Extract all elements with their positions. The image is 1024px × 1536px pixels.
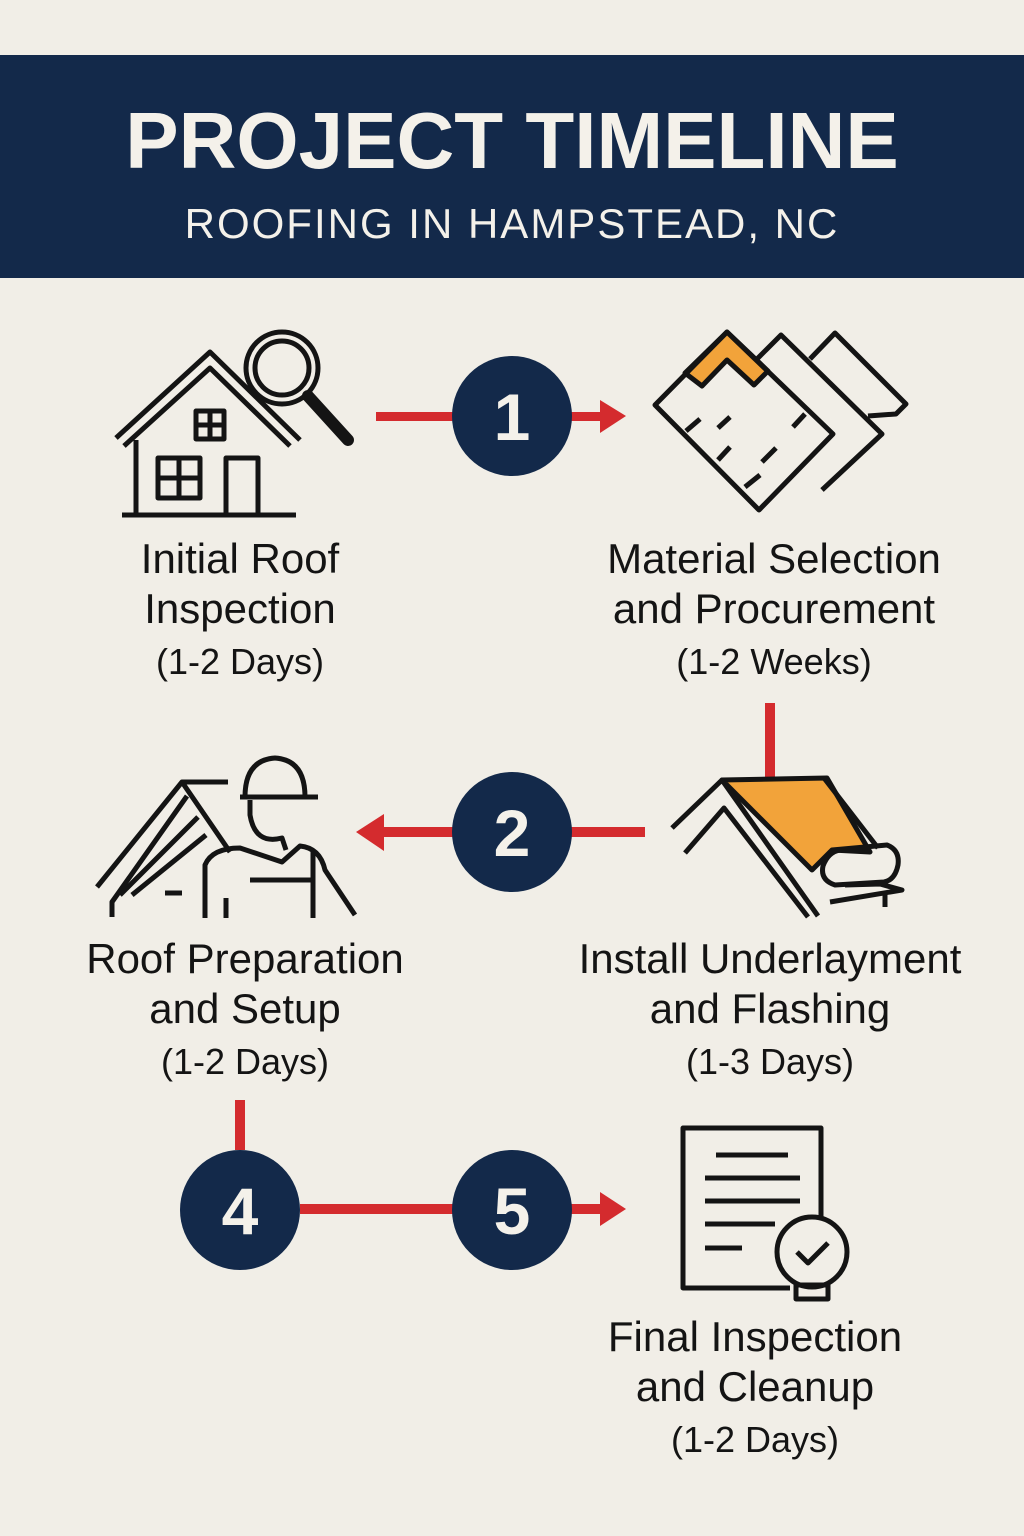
label: underlayment: and Flashing	[650, 985, 890, 1032]
icon: materials	[655, 332, 906, 510]
label: material selection: Material Selection	[607, 535, 941, 582]
step numbers: 2	[494, 796, 530, 870]
subtitle: ROOFING IN HAMPSTEAD, NC	[185, 200, 839, 247]
step numbers	[222, 380, 530, 1248]
label: roof preparation	[86, 935, 404, 1082]
icon: worker on roof	[97, 758, 355, 918]
label: roof preparation: (1-2 Days)	[161, 1041, 329, 1082]
label: roof preparation: Roof Preparation	[86, 935, 404, 982]
label: step 1: Inspection	[144, 585, 336, 632]
label: underlayment: (1-3 Days)	[686, 1041, 854, 1082]
label: material selection: and Procurement	[613, 585, 935, 632]
label: step 1	[141, 535, 340, 682]
label: final inspection: (1-2 Days)	[671, 1419, 839, 1460]
label: underlayment	[579, 935, 962, 1082]
step numbers: 5	[494, 1174, 530, 1248]
icon: underlayment roll	[672, 778, 902, 917]
step numbers: 4	[222, 1174, 259, 1248]
label: roof preparation: and Setup	[149, 985, 341, 1032]
icon: checklist document	[683, 1128, 847, 1299]
header banner	[0, 55, 1024, 278]
label: step 1: Initial Roof	[141, 535, 339, 582]
label: final inspection: Final Inspection	[608, 1313, 902, 1360]
label: material selection	[607, 535, 941, 682]
step numbers: 1	[494, 380, 530, 454]
step circles	[180, 356, 572, 1270]
icon: house with magnifier	[116, 332, 348, 515]
title: PROJECT TIMELINE	[125, 96, 899, 185]
label: step 1: (1-2 Days)	[156, 641, 324, 682]
label: final inspection: and Cleanup	[636, 1363, 874, 1410]
connector arrows	[235, 400, 775, 1226]
label: material selection: (1-2 Weeks)	[676, 641, 872, 682]
label: final inspection	[608, 1313, 902, 1460]
label: underlayment: Install Underlayment	[579, 935, 961, 982]
